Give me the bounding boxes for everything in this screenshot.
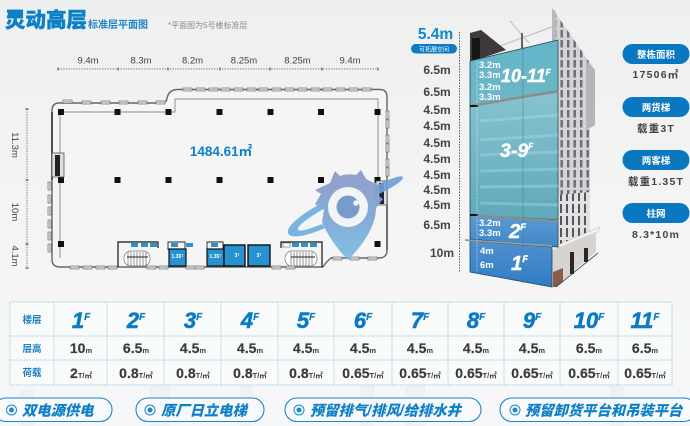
floor bands [480,115,558,205]
info: freight lifts: 两货梯 [642,102,671,114]
row: floors: F [139,312,146,323]
floor plan [48,88,389,269]
row: floors: 8 [467,308,479,333]
inner wall [60,99,378,258]
row: floors: F [479,312,486,323]
left dimensions: 4.1m [9,245,20,267]
row headers [22,314,42,379]
info: total area: 整栋面积 [637,49,675,61]
row headers: 楼层 [22,314,42,326]
row: floors: F [653,312,660,323]
floor names: 3-9 [500,140,528,162]
side facade lower [558,192,590,248]
row: heights: 4.5m [463,340,489,356]
roof tower [470,30,506,62]
row: loads [70,365,666,381]
info: column grid [622,203,690,241]
extension height: 5.4m [418,26,453,43]
floor height labels: 3.3m [479,228,501,239]
floor names: F [522,254,528,264]
row: loads: 0.8T/㎡ [119,365,153,381]
height labels: 4.5m [423,183,451,197]
top windows [63,88,371,104]
top dimensions [58,56,378,70]
core: left stair [118,242,158,267]
row: loads: 0.8T/㎡ [233,365,267,381]
top dimensions: 8.25m [231,56,257,66]
floor height labels [477,60,501,272]
floor height labels: 3.2m [479,60,501,71]
floor height labels: 3.2m [479,82,501,93]
row: heights: 6.5m [123,340,149,356]
benefit: loading platforms [500,398,690,422]
info: passenger lifts [622,150,690,188]
right stair [376,181,387,205]
row: heights: 4.5m [519,340,545,356]
roof frame [497,21,552,47]
height labels [411,26,457,260]
info: freight lifts: 载重3T [637,122,675,135]
row: floors: F [366,312,373,323]
row: heights: 6.5m [632,340,658,356]
core: right stair [281,242,322,267]
watermark logo [288,170,403,260]
info: column grid: 柱网 [646,208,666,220]
floor names: F [528,142,534,151]
height labels: 4.5m [423,152,451,166]
height labels: 4.5m [423,198,451,212]
benefit: loading platforms: 预留卸货平台和吊装平台 [525,402,684,420]
note: *平面图为5号楼标准层 [168,20,248,30]
row: heights: 4.5m [407,340,433,356]
floor area: 1484.61㎡ [190,143,253,159]
height labels: 6.5m [423,218,451,232]
glass 1F [470,241,552,287]
row: floors: F [253,312,260,323]
top dimensions: 8.25m [284,56,311,66]
height labels: 4.5m [423,136,451,150]
benefit: reserved shafts [285,398,481,422]
row headers: 荷载 [22,367,42,379]
row: floors: 11 [631,308,653,333]
core: 3T lifts: 3ᵀ [235,253,240,259]
floor names: F [520,222,526,232]
row: loads: 0.65T/㎡ [399,365,441,381]
faint bottom stripes [20,385,624,426]
extension pill [411,44,457,54]
row: loads: 0.65T/㎡ [511,365,553,381]
info: passenger lifts: 两客梯 [642,155,671,167]
extension pill: 可拓展空间 [419,46,449,54]
benefit: dual power [0,398,112,422]
row headers: 层高 [22,343,42,355]
info: column grid: 8.3*10m [632,229,680,241]
columns [58,109,380,247]
benefit: Hitachi lifts [136,398,264,422]
glass 10-11F [470,40,558,106]
core: 1.35T lifts: 1.35ᵀ [172,254,184,260]
top dimensions: 9.4m [339,56,361,66]
floor height labels: 6m [480,260,494,271]
row: floors: 7 [411,308,423,333]
row: loads: 0.65T/㎡ [342,365,384,381]
height labels: 4.5m [423,119,451,133]
row: floors: F [423,312,430,323]
glass 3-9F [470,92,558,220]
info: total area [622,44,690,81]
row: loads: 0.65T/㎡ [568,365,610,381]
title: 灵动高层 [5,8,87,32]
row: floors: 6 [354,308,366,333]
info: freight lifts [622,97,690,135]
row: loads: 2T/㎡ [70,365,92,381]
side facade upper [552,8,595,220]
floor names: 1 [511,252,522,275]
row: heights: 4.5m [350,340,376,356]
row: floors [72,308,660,333]
row: floors: 4 [241,308,253,333]
left stair [52,153,64,177]
left dimensions: 11.3m [9,132,20,158]
title [5,8,148,32]
floor height labels: 3.2m [479,218,501,229]
benefit: reserved shafts: 预留排气/排风/给排水井 [310,402,463,420]
row: heights: 4.5m [180,340,206,356]
row: floors: F [84,312,91,323]
floor height labels: 3.3m [479,70,501,81]
height labels: 4.5m [423,168,451,182]
floor names [500,66,552,275]
benefit: Hitachi lifts: 原厂日立电梯 [161,402,249,420]
row: loads: 0.8T/㎡ [176,365,210,381]
top dimensions: 8.2m [182,56,203,66]
top dimensions: 9.4m [77,56,99,66]
row: heights: 6.5m [576,340,602,356]
row: floors: 2 [127,308,139,333]
core: 1.35T lifts: 1.35ᵀ [210,254,222,260]
row: heights: 10m [70,340,92,356]
row: floors: 3 [184,308,196,333]
info: passenger lifts: 载重1.35T [628,175,684,188]
row: loads: 0.65T/㎡ [455,365,497,381]
core: 3T lifts: 3ᵀ [257,253,262,259]
row: floors: 9 [523,308,535,333]
floor names: 10-11 [501,66,546,86]
row: floors: F [535,312,542,323]
subtitle: 标准层平面图 [88,18,148,31]
height labels: 4.5m [423,103,451,117]
outer wall [52,90,387,267]
podium ledge [558,227,600,252]
row: floors: F [309,312,316,323]
row: loads: 0.8T/㎡ [289,365,323,381]
glass 2F [470,215,558,247]
core: 1.35T lifts [168,242,224,266]
floor height labels: 3.3m [479,92,501,103]
benefit: dual power: 双电源供电 [22,402,95,420]
left dimensions: 10m [9,203,20,221]
row: heights: 4.5m [293,340,319,356]
building illustration [465,8,600,287]
row: loads: 0.65T/㎡ [624,365,666,381]
top dimensions: 8.3m [130,56,152,66]
left dimensions [9,109,28,268]
core: 3T lifts [224,245,270,266]
floor names: 2 [509,220,520,243]
right height dimension line [458,32,460,272]
row: heights: 4.5m [237,340,263,356]
floor height labels: 4m [480,246,494,257]
row: floors: 1 [72,308,84,333]
row: floors: F [598,312,605,323]
podium [552,232,596,287]
slabs [470,91,558,106]
height labels: 6.5m [423,63,451,77]
floor names: F [546,68,552,77]
floor table [10,302,672,385]
info: total area: 17506㎡ [633,69,679,81]
row: heights [70,340,658,356]
height labels: 10m [430,246,454,260]
row: floors: F [196,312,203,323]
height labels: 6.5m [423,85,451,99]
side windows [48,111,389,269]
row: floors: 5 [297,308,309,333]
row: floors: 10 [574,308,598,333]
